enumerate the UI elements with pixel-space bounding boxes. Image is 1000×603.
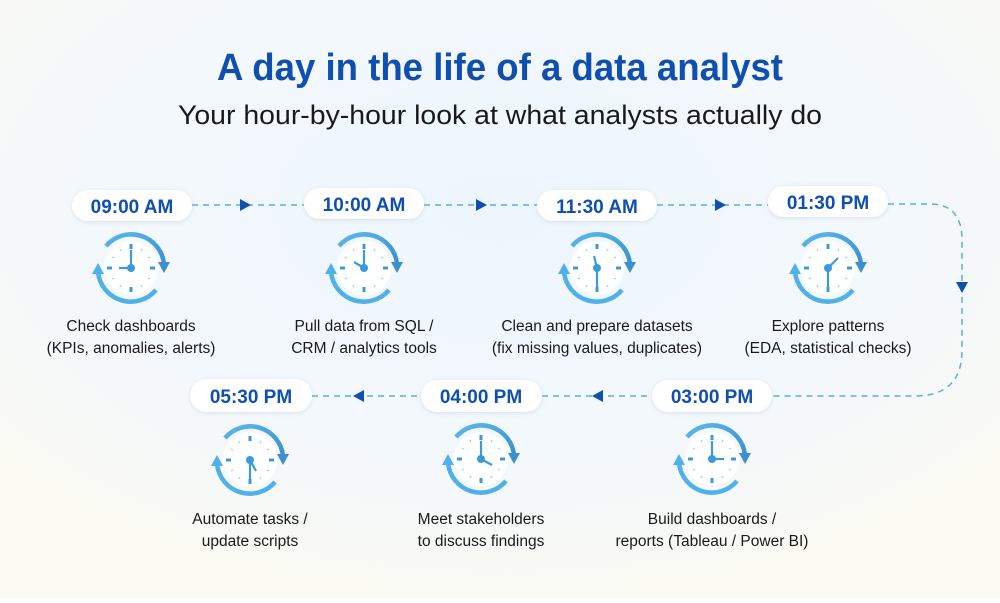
step 7: Automate tasks / — [192, 511, 308, 528]
step 1: 09:00 AM — [91, 197, 173, 218]
step 5: 03:00 PM — [671, 387, 753, 408]
step 2 — [291, 188, 437, 357]
step 2: 10:00 AM — [323, 195, 405, 216]
step 1 — [47, 190, 215, 357]
connector path — [192, 204, 962, 396]
step 5: Build dashboards / — [648, 511, 777, 528]
step 2: Pull data from SQL / — [294, 318, 434, 335]
step 6: Meet stakeholders — [418, 511, 545, 528]
title: A day in the life of a data analyst — [217, 47, 783, 89]
step 2: CRM / analytics tools — [291, 340, 437, 357]
step 4: (EDA, statistical checks) — [744, 340, 912, 357]
step 4 — [744, 186, 912, 357]
step 1: (KPIs, anomalies, alerts) — [47, 340, 215, 357]
arrows — [240, 199, 968, 402]
step 3: 11:30 AM — [556, 197, 638, 218]
step 3: (fix missing values, duplicates) — [492, 340, 702, 357]
step 3 — [492, 190, 702, 357]
step 6 — [418, 380, 545, 550]
step 3: Clean and prepare datasets — [501, 318, 693, 335]
step 6: to discuss findings — [418, 533, 545, 550]
step 7 — [190, 379, 312, 550]
step 5: reports (Tableau / Power BI) — [616, 533, 808, 550]
step 7: update scripts — [202, 533, 298, 550]
step 4: 01:30 PM — [787, 193, 869, 214]
step 1: Check dashboards — [66, 318, 196, 335]
step 4: Explore patterns — [772, 318, 885, 335]
step 5 — [616, 380, 808, 550]
step 6: 04:00 PM — [440, 387, 522, 408]
step 7: 05:30 PM — [210, 387, 292, 408]
subtitle: Your hour-by-hour look at what analysts actually do — [178, 100, 822, 130]
